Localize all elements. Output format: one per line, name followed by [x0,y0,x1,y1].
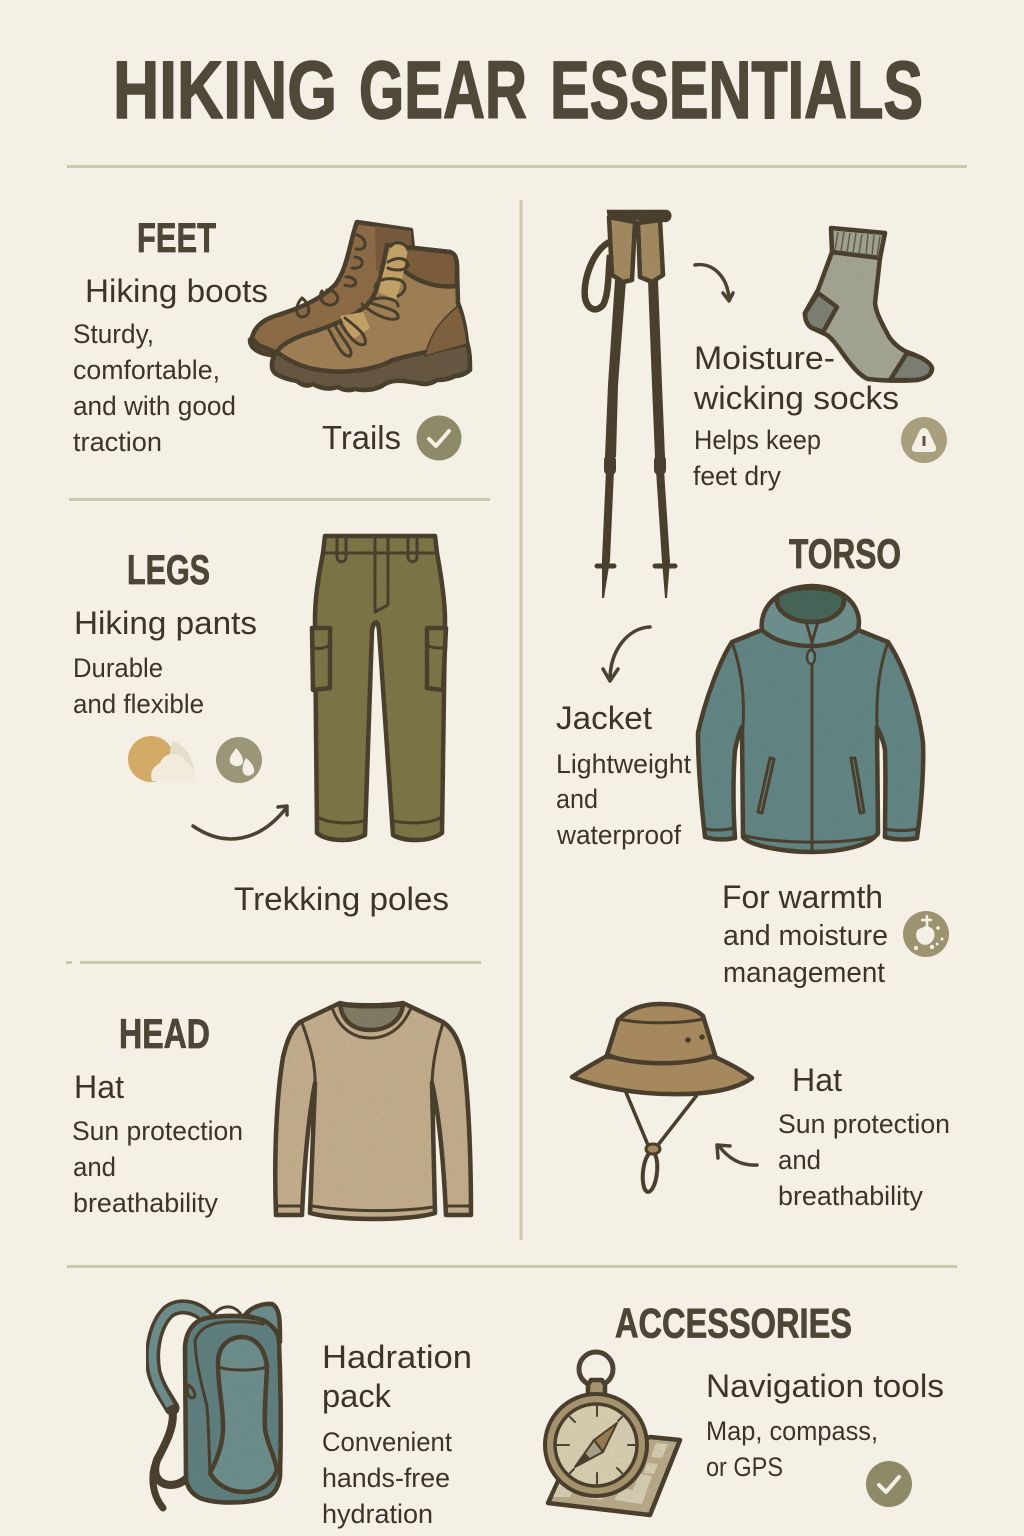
description: boots: traction [73,427,162,457]
description: navigation tools [706,1416,878,1482]
description: boots [73,319,236,457]
icon: check badge [416,416,462,460]
title: HIKING [113,45,337,136]
description: navigation tools: or GPS [706,1452,783,1482]
panel: torso [556,530,950,1211]
description: boots: and with good [73,391,236,421]
description: pants: Durable [73,653,163,683]
icon: compass and map [545,1352,680,1515]
heading: legs: LEGS [127,546,210,593]
description: hydration pack: hands-free [322,1463,450,1493]
arrow: to pants [193,806,287,839]
icon: trekking poles [585,211,675,598]
label: trekking poles: Trekking poles [234,881,449,917]
panel: legs [73,536,449,917]
heading: head: HEAD [119,1010,210,1057]
heading: feet: FEET [137,214,216,261]
description: jacket [556,749,691,850]
heading: accessories: ACCESSORIES [615,1300,852,1346]
item title: hydration pack: Hadration [322,1339,472,1375]
description: jacket: Lightweight [556,749,691,779]
icon: wool sock [805,228,932,381]
description: socks [693,425,821,491]
description: pants: and flexible [73,689,204,719]
panel: hydration pack [153,1304,472,1529]
description: navigation tools: Map, compass, [706,1416,878,1446]
description: warmth and moisture: and moisture [723,920,888,952]
description: boots: Sturdy, [73,319,154,349]
description: boots: comfortable, [73,355,220,385]
arrow: to socks [695,265,733,301]
item title: hiking pants: Hiking pants [74,605,257,641]
heading: torso: TORSO [789,530,901,577]
icon: hiking boots [250,222,470,390]
icon: hiking pants [312,536,446,840]
item title: hat: Hat [74,1069,124,1105]
icon: bucket hat [572,1004,752,1193]
description: socks: Helps keep [694,425,821,455]
description: hydration pack: Convenient [322,1427,452,1457]
panel: socks and poles [585,211,947,598]
icon: backpack [153,1304,281,1508]
arrow: to jacket [603,627,650,681]
description: hydration pack [322,1427,452,1529]
description: hat: breathability [73,1188,218,1218]
item title: hydration pack [322,1339,472,1414]
item title: hydration pack: pack [322,1378,392,1414]
icon: caution badge [901,417,947,463]
title [113,45,923,136]
description: hat [778,1109,950,1211]
title: GEAR [359,45,527,136]
panel: accessories [545,1300,944,1515]
description: jacket: and [556,784,598,814]
item title: hiking boots: Hiking boots [85,273,268,309]
item title: jacket: Jacket [556,700,652,736]
panel: feet [73,214,470,460]
icon: check badge [866,1461,912,1507]
description: hat: Sun protection [72,1116,243,1146]
item title: hat: Hat [792,1062,842,1098]
description: hat: Sun protection [778,1109,950,1139]
description: warmth and moisture: For warmth [722,879,883,915]
description: jacket: waterproof [556,820,681,850]
item title: socks: Moisture- [694,340,835,376]
item title: socks [693,340,899,416]
description: hat: breathability [778,1181,923,1211]
description: warmth and moisture [722,879,888,989]
description: hat: and [778,1145,821,1175]
icon: base layer shirt [275,1003,471,1219]
description: hydration pack: hydration [322,1499,433,1529]
description: hat [72,1116,243,1218]
icon: cotton material [128,736,195,782]
item title: navigation tools: Navigation tools [706,1368,944,1404]
icon: moisture drops [216,737,262,783]
arrow: to hat [717,1145,757,1165]
description: hat: and [73,1152,116,1182]
icon: turtle badge [903,911,949,957]
description: pants [73,653,204,719]
icon: jacket [698,586,923,852]
description: socks: feet dry [693,461,781,491]
panel: head [72,1003,471,1219]
item title: socks: wicking socks [693,380,899,416]
label: trails: Trails [322,419,401,456]
description: warmth and moisture: management [723,957,885,989]
